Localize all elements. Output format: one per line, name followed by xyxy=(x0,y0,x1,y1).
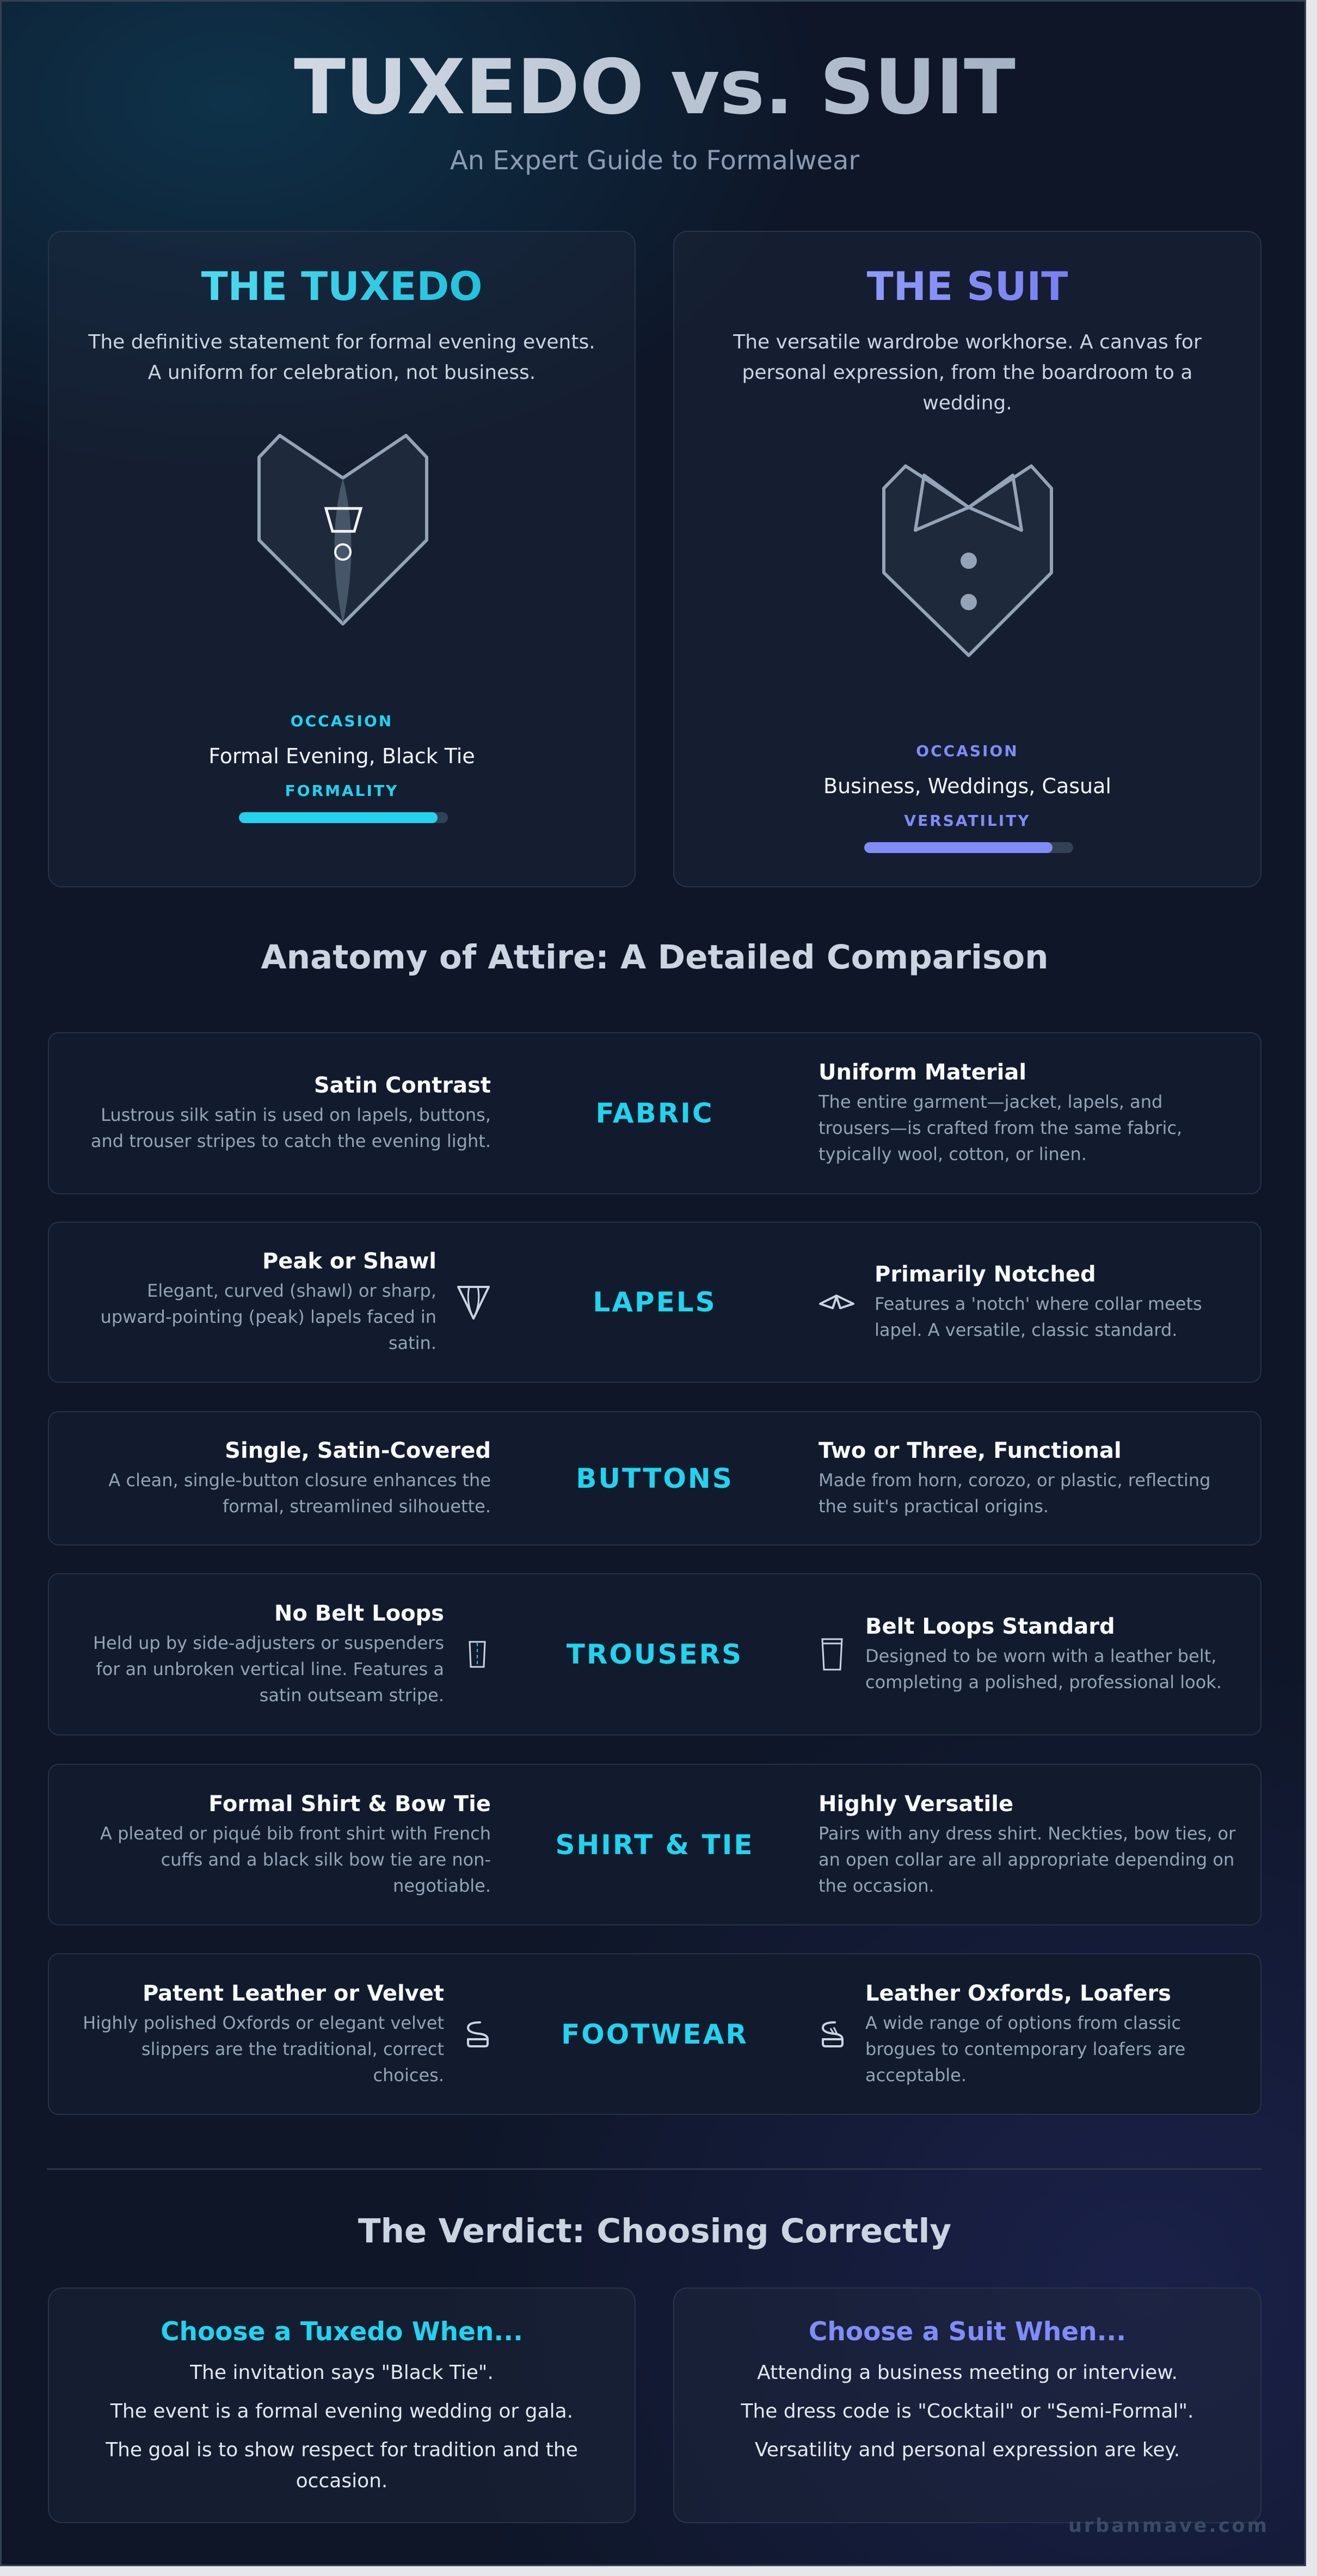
panel: choose suit xyxy=(673,2287,1261,2523)
icon: tuxedo jacket xyxy=(257,434,428,625)
tuxedo footwear xyxy=(83,1980,489,2085)
suit fabric xyxy=(818,1060,1182,1164)
label: fabric: FABRIC xyxy=(595,1097,714,1129)
tuxedo description: A uniform for celebration, not business. xyxy=(148,361,536,384)
suit buttons: Made from horn, corozo, or plastic, reflecting xyxy=(818,1470,1210,1491)
suit reasons xyxy=(674,2357,1260,2465)
tuxedo reasons: occasion. xyxy=(296,2470,387,2492)
tuxedo lapels: upward-pointing (peak) lapels faced in xyxy=(101,1307,436,1327)
suit footwear: Leather Oxfords, Loafers xyxy=(865,1980,1171,2005)
suit trousers xyxy=(821,1614,1222,1692)
tuxedo fabric: Lustrous silk satin is used on lapels, buttons, xyxy=(101,1105,491,1125)
label: buttons: BUTTONS xyxy=(576,1462,734,1494)
tuxedo shirt: cuffs and a black silk bow tie are non- xyxy=(161,1849,491,1869)
watermark: urbanmave.com xyxy=(1068,2515,1269,2537)
tuxedo shirt: negotiable. xyxy=(393,1875,491,1896)
heading: the tuxedo xyxy=(49,262,635,311)
suit shirt: the occasion. xyxy=(818,1875,934,1896)
icon: tuxedo trousers xyxy=(469,1641,486,1668)
tuxedo fabric: Satin Contrast xyxy=(314,1073,491,1098)
row: trousers xyxy=(48,1573,1261,1735)
icon: notched lapel xyxy=(818,1295,854,1309)
heading: verdict: The Verdict: Choosing Correctly xyxy=(358,2212,951,2250)
tuxedo fabric: and trouser stripes to catch the evening light. xyxy=(91,1131,491,1151)
tuxedo trousers: No Belt Loops xyxy=(274,1601,444,1626)
suit trousers: completing a polished, professional look. xyxy=(865,1672,1222,1692)
label: footwear: FOOTWEAR xyxy=(561,2019,748,2050)
label: trousers: TROUSERS xyxy=(567,1639,743,1670)
formality bar xyxy=(239,812,448,823)
suit lapels: lapel. A versatile, classic standard. xyxy=(875,1320,1177,1340)
suit buttons xyxy=(818,1438,1210,1517)
versatility label: VERSATILITY xyxy=(904,812,1031,830)
suit lapels xyxy=(818,1262,1202,1340)
suit trousers: Belt Loops Standard xyxy=(865,1614,1115,1639)
tuxedo buttons: Single, Satin-Covered xyxy=(225,1438,491,1463)
suit reasons: Versatility and personal expression are key. xyxy=(755,2439,1180,2461)
panel: the suit xyxy=(673,231,1261,887)
tuxedo lapels: Elegant, curved (shawl) or sharp, xyxy=(147,1280,436,1301)
tuxedo shirt: Formal Shirt & Bow Tie xyxy=(208,1791,491,1816)
tuxedo reasons: The event is a formal evening wedding or gala. xyxy=(110,2400,573,2422)
suit description xyxy=(733,331,1202,414)
tuxedo buttons: A clean, single-button closure enhances the xyxy=(108,1470,491,1491)
icon: suit trousers xyxy=(821,1639,843,1670)
tuxedo lapels: satin. xyxy=(389,1333,436,1353)
heading: the suit: THE SUIT xyxy=(867,263,1068,309)
tuxedo description: The definitive statement for formal evening events. xyxy=(88,331,595,353)
suit shirt: Highly Versatile xyxy=(818,1791,1013,1816)
label: shirt & tie: SHIRT & TIE xyxy=(555,1829,754,1861)
suit footwear xyxy=(822,1980,1185,2085)
row: lapels xyxy=(48,1222,1261,1383)
icon: oxford shoe xyxy=(822,2021,844,2047)
suit lapels: Features a 'notch' where collar meets xyxy=(875,1293,1202,1314)
tuxedo shirt xyxy=(100,1791,491,1896)
icon: suit jacket xyxy=(882,464,1053,657)
suit footwear: brogues to contemporary loafers are xyxy=(865,2038,1185,2059)
tuxedo reasons: The goal is to show respect for tradition and the xyxy=(106,2439,578,2461)
suit description: personal expression, from the boardroom to a xyxy=(742,361,1192,384)
tuxedo trousers: Held up by side-adjusters or suspenders xyxy=(93,1633,444,1653)
icon: formal shoe xyxy=(467,2021,489,2047)
title xyxy=(2,41,1308,133)
tuxedo reasons: The invitation says "Black Tie". xyxy=(190,2362,494,2384)
heading: choose suit: Choose a Suit When... xyxy=(809,2317,1126,2347)
subtitle: An Expert Guide to Formalwear xyxy=(450,145,859,176)
tuxedo lapels xyxy=(101,1249,490,1353)
row: shirt & tie xyxy=(48,1764,1261,1925)
suit fabric: trousers—is crafted from the same fabric, xyxy=(818,1118,1182,1138)
tuxedo trousers: for an unbroken vertical line. Features a xyxy=(96,1659,444,1679)
suit description: The versatile wardrobe workhorse. A canvas for xyxy=(733,331,1202,353)
tuxedo lapels: Peak or Shawl xyxy=(262,1249,436,1274)
heading: choose tuxedo: Choose a Tuxedo When... xyxy=(161,2317,523,2347)
occasion label: OCCASION xyxy=(291,712,393,730)
suit fabric: typically wool, cotton, or linen. xyxy=(818,1144,1087,1164)
suit buttons: the suit's practical origins. xyxy=(818,1496,1049,1517)
tuxedo trousers: satin outseam stripe. xyxy=(260,1685,444,1706)
tuxedo reasons xyxy=(106,2362,578,2492)
panel: the tuxedo xyxy=(48,231,636,887)
suit lapels: Primarily Notched xyxy=(875,1262,1096,1287)
tuxedo trousers xyxy=(93,1601,486,1706)
suit shirt: an open collar are all appropriate depending on xyxy=(818,1849,1234,1869)
tuxedo footwear: slippers are the traditional, correct xyxy=(141,2038,444,2059)
suit fabric: Uniform Material xyxy=(818,1060,1026,1085)
versatility bar xyxy=(864,842,1073,853)
tuxedo buttons xyxy=(108,1438,491,1517)
tuxedo footwear: Patent Leather or Velvet xyxy=(143,1980,444,2005)
suit fabric: The entire garment—jacket, lapels, and xyxy=(818,1091,1162,1112)
suit shirt xyxy=(818,1791,1235,1896)
suit reasons: The dress code is "Cocktail" or "Semi-Formal". xyxy=(741,2400,1194,2422)
row: buttons xyxy=(48,1411,1261,1545)
suit reasons: Attending a business meeting or interview. xyxy=(757,2362,1178,2384)
panel: choose tuxedo xyxy=(48,2287,636,2523)
icon: peak lapel xyxy=(457,1286,490,1320)
suit buttons: Two or Three, Functional xyxy=(818,1438,1122,1463)
label: lapels: LAPELS xyxy=(593,1286,717,1318)
occasion value: Formal Evening, Black Tie xyxy=(208,744,475,768)
row: fabric xyxy=(48,1032,1261,1194)
suit footwear: A wide range of options from classic xyxy=(865,2012,1181,2033)
suit trousers: Designed to be worn with a leather belt, xyxy=(865,1646,1216,1666)
row: footwear xyxy=(48,1953,1261,2115)
tuxedo footwear: Highly polished Oxfords or elegant velvet xyxy=(83,2012,444,2033)
suit footwear: acceptable. xyxy=(865,2064,967,2085)
heading: the tuxedo: THE TUXEDO xyxy=(201,263,482,309)
tuxedo buttons: formal, streamlined silhouette. xyxy=(223,1496,491,1517)
occasion label: OCCASION xyxy=(916,742,1019,760)
formality label: FORMALITY xyxy=(285,782,398,800)
heading: the suit xyxy=(674,262,1260,311)
suit shirt: Pairs with any dress shirt. Neckties, bow ties, or xyxy=(818,1823,1235,1843)
tuxedo footwear: choices. xyxy=(373,2064,444,2085)
title: TUXEDO vs. SUIT xyxy=(294,43,1016,131)
occasion value: Business, Weddings, Casual xyxy=(823,774,1111,798)
tuxedo description xyxy=(88,331,595,384)
heading: anatomy: Anatomy of Attire: A Detailed Comparison xyxy=(261,938,1049,977)
tuxedo shirt: A pleated or piqué bib front shirt with French xyxy=(100,1823,491,1843)
tuxedo fabric xyxy=(91,1073,491,1151)
suit description: wedding. xyxy=(922,392,1012,414)
